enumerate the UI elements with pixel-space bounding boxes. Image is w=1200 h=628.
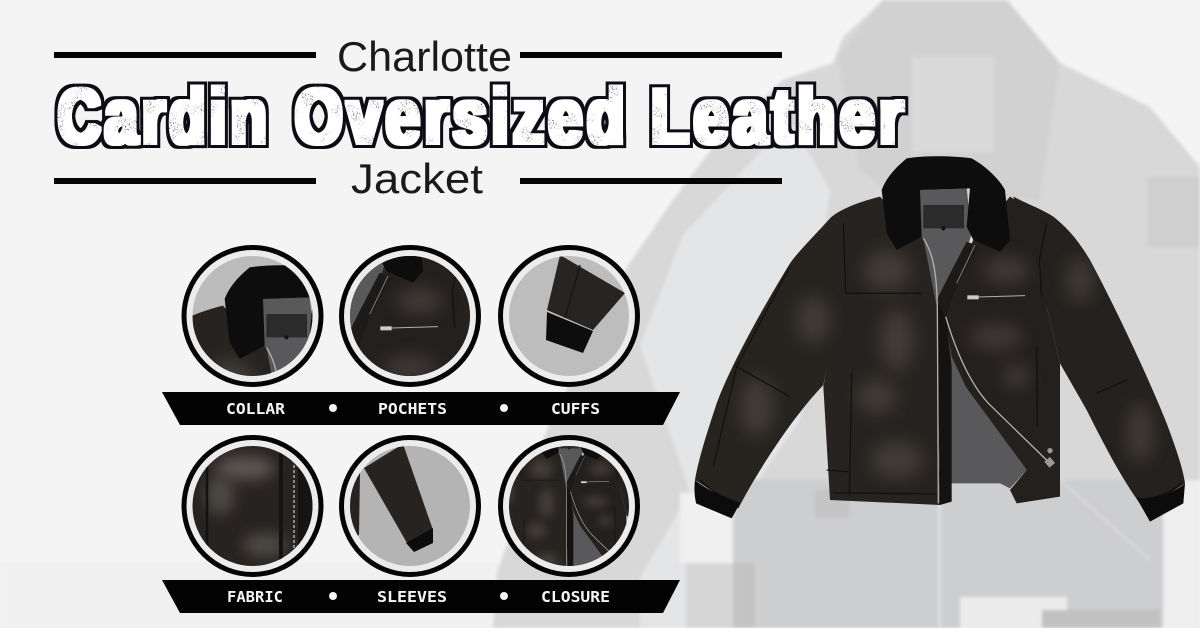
- label: fabric: FABRIC: [227, 588, 283, 606]
- main product photo: leather jacket: [694, 156, 1185, 522]
- collar: [882, 156, 1010, 252]
- detail: cuffs circle: [500, 248, 638, 384]
- lining: [920, 188, 1027, 488]
- right body panel: [945, 197, 1060, 503]
- bullet: [500, 404, 508, 412]
- leather highlights: [740, 250, 1153, 478]
- decorative title rules: [54, 52, 782, 184]
- collar flap: [937, 242, 978, 317]
- bullet: [329, 592, 337, 600]
- main heading: Cardin Oversized Leather: Oversized: [295, 72, 629, 160]
- detail: collar circle: [182, 245, 324, 387]
- label: collar: COLLAR: [226, 400, 286, 418]
- left body panel: [823, 197, 940, 505]
- bullet: [500, 592, 508, 600]
- detail: sleeves circle: [342, 438, 478, 574]
- label: cuffs: CUFFS: [551, 400, 600, 418]
- title line: Charlotte: Charlotte: [337, 33, 512, 80]
- seams: [700, 223, 1182, 503]
- title line: Jacket: Jacket: [351, 155, 483, 202]
- zippers: [923, 238, 1052, 503]
- inner placket: [937, 300, 952, 505]
- detail: pockets circle: [339, 245, 481, 387]
- banner: fabric, sleeves, closure: [162, 580, 680, 613]
- main heading: Cardin Oversized Leather: [58, 72, 908, 160]
- label: pockets: POCHETS: [378, 400, 447, 418]
- label: closure: CLOSURE: [541, 588, 610, 606]
- detail: fabric circle: [184, 438, 321, 574]
- right sleeve: [1013, 197, 1185, 510]
- label: sleeves: SLEEVES: [377, 588, 447, 606]
- left sleeve: [695, 197, 880, 508]
- banner: collar, pockets, cuffs: [162, 392, 680, 425]
- title block: [54, 33, 908, 202]
- cuffs: [694, 480, 740, 518]
- main heading: Cardin Oversized Leather: Leather: [651, 72, 908, 160]
- main heading: Cardin Oversized Leather: Cardin: [58, 72, 271, 160]
- bullet: [329, 404, 337, 412]
- detail: closure circle: [498, 435, 640, 577]
